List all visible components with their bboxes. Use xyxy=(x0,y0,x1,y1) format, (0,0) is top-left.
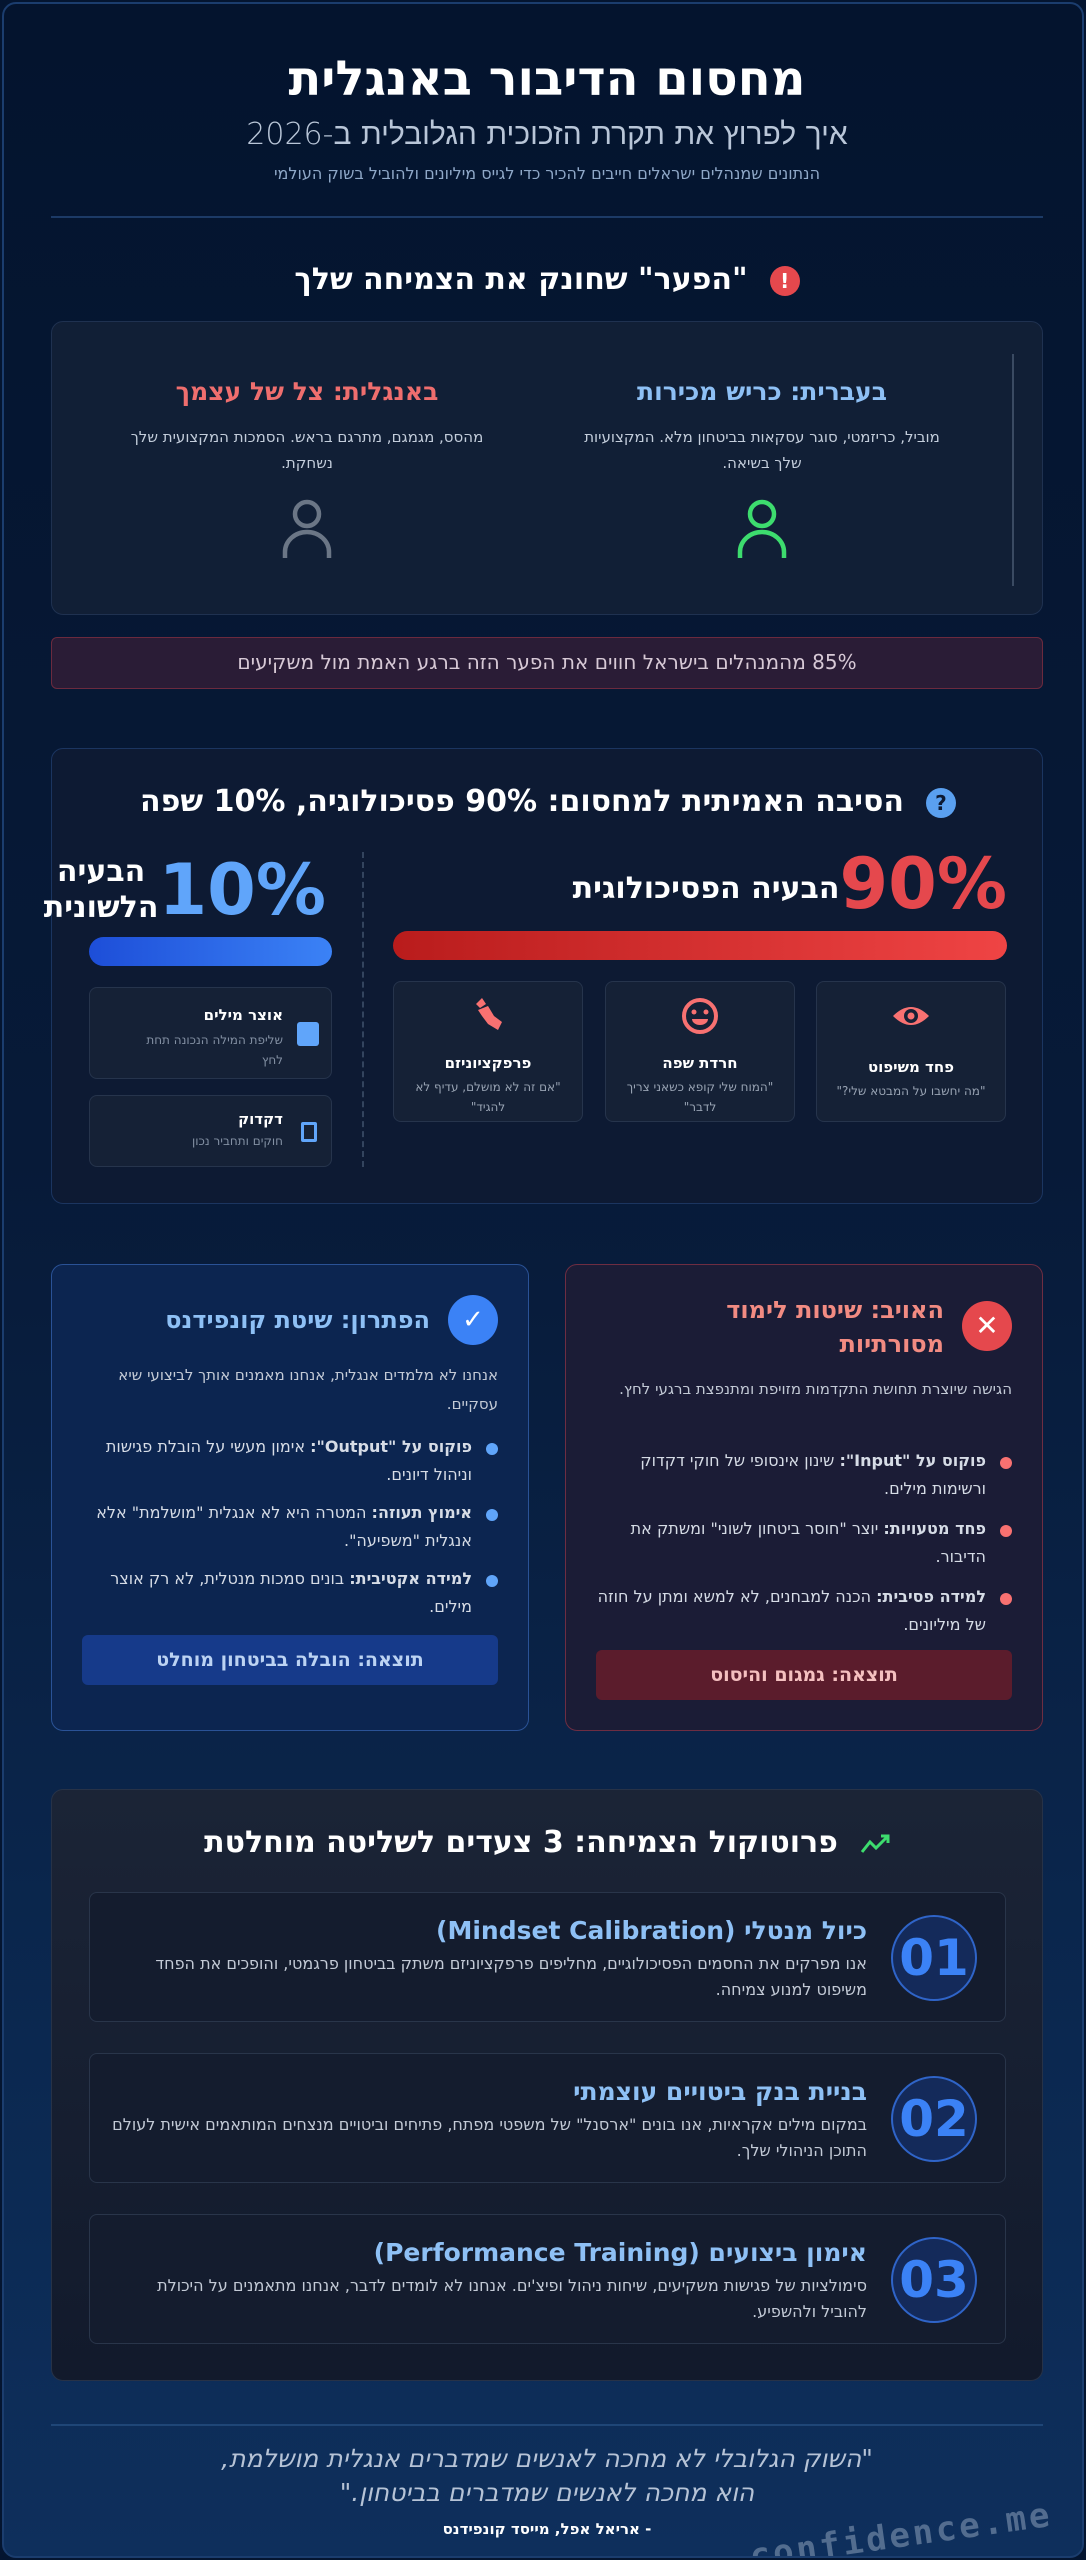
bullet list: למידה פסיבית: הכנה למבחנים, לא למשא ומתן על חוזה של מיליונים. xyxy=(598,1587,986,1634)
icon: question: ? xyxy=(935,790,947,814)
step 3: 03 xyxy=(899,2251,969,2309)
stat bar: 85% xyxy=(51,637,1043,689)
card: perfectionism: להגיד" xyxy=(471,1100,505,1114)
step 3: אימון ביצועים (Performance Training) xyxy=(374,2238,867,2267)
card: fear of judgment: פחד משיפוט xyxy=(868,1058,954,1076)
step 3: סימולציות של פגישות משקיעים, שיחות ניהול ופיצ'ים. אנחנו לא לומדים לדבר, אנחנו מתאמנים על היכולת להוביל ולהשפיע. xyxy=(157,2276,867,2321)
icon: alert: ! xyxy=(780,268,789,292)
10% label: 10% xyxy=(158,849,326,931)
heading: הפתרון: שיטת קונפידנס xyxy=(165,1306,430,1334)
icon: gray person xyxy=(282,500,332,558)
panel: enemy traditional methods xyxy=(565,1264,1043,1731)
icon: check: ✓ xyxy=(462,1305,484,1335)
card: speech anxiety: לדבר" xyxy=(684,1100,716,1114)
bullet list xyxy=(96,1437,498,1616)
quote: "השוק הגלובלי לא מחכה לאנשים שמדברים אנגלית מושלמת, xyxy=(221,2444,873,2473)
icon: green person xyxy=(738,500,786,558)
panel: growth protocol xyxy=(51,1789,1043,2381)
panel: gap comparison xyxy=(51,321,1043,615)
card: perfectionism: "אם זה לא מושלם, עדיף לא xyxy=(415,1080,561,1094)
panel: solution confidence method xyxy=(51,1264,529,1731)
bullet list xyxy=(598,1451,1012,1634)
card: vocabulary: אוצר מילים xyxy=(204,1006,283,1024)
bullet list: פחד מטעויות: יוצר "חוסר ביטחון לשוני" ומשתק את הדיבור. xyxy=(631,1519,986,1566)
10% label: הבעיה xyxy=(57,854,145,889)
quote xyxy=(221,2444,873,2538)
dashed divider xyxy=(362,852,364,1167)
bullet list: פוקוס על "Output": אימון מעשי על הובלת פגישות וניהול דיונים. xyxy=(106,1437,472,1484)
step 1: כיול מנטלי (Mindset Calibration) xyxy=(436,1916,867,1945)
heading: פרוטוקול הצמיחה: 3 צעדים לשליטה מוחלטת xyxy=(204,1825,838,1860)
heading: הסיבה האמיתית למחסום: 90% פסיכולוגיה, 10% שפה xyxy=(140,784,904,819)
bullet list: אימוץ תעוזה: המטרה היא לא אנגלית "מושלמת" אלא אנגלית "משפיעה". xyxy=(96,1503,472,1550)
title: מחסום הדיבור באנגלית xyxy=(288,51,806,107)
card: fear of judgment xyxy=(816,981,1006,1122)
step 2: במקום מילים אקראיות, אנו בונים "ארסנל" של משפטי מפתח, פתיחים וביטויים מנצחים המותאמים אישית לעולם התוכן הניהולי שלך. xyxy=(112,2115,867,2160)
red bar xyxy=(393,931,1007,960)
column: english: מהסס, מגמגם, מתרגם בראש. הסמכות המקצועית שלך xyxy=(131,428,483,446)
card: vocabulary xyxy=(89,987,332,1079)
card: speech anxiety xyxy=(605,981,795,1122)
result box xyxy=(596,1650,1012,1700)
90% label xyxy=(572,843,1007,925)
90% label: 90% xyxy=(839,843,1007,925)
icon: question xyxy=(926,788,956,818)
card: grammar xyxy=(89,1095,332,1167)
bullet list: פוקוס על "Input": שינון אינסופי של חוקי דקדוק ורשימות מילים. xyxy=(640,1451,986,1498)
column: english: נשחקת. xyxy=(281,454,333,472)
step 2: בניית בנק ביטויים עוצמתי xyxy=(573,2077,867,2106)
column: hebrew xyxy=(584,377,940,558)
step 1 xyxy=(89,1892,1006,2022)
card: speech anxiety: חרדת שפה xyxy=(662,1054,738,1072)
column: hebrew: מוביל, כריזמטי, סוגר עסקאות בביטחון מלא. המקצועיות xyxy=(584,428,940,446)
tagline: הנתונים שמנהלים ישראלים חייבים להכיר כדי לגייס מיליונים ולהוביל בשוק העולמי xyxy=(274,164,820,183)
step 1: אנו מפרקים את החסמים הפסיכולוגיים, מחליפים פרפקציוניזם משתק בביטחון פרגמטי, והופכים את הפחד משיפוט למנוע צמיחה. xyxy=(155,1954,867,1999)
card: speech anxiety: "המוח שלי קופא כשאני צריך xyxy=(627,1080,773,1094)
icon: trend xyxy=(860,1834,890,1853)
icon: check xyxy=(448,1295,498,1345)
icon: alert xyxy=(770,266,800,296)
subtitle: איך לפרוץ את תקרת הזכוכית הגלובלית ב-2026 xyxy=(246,117,848,152)
column: hebrew: שלך בשיאה. xyxy=(722,454,802,472)
icon: X: ✕ xyxy=(975,1309,999,1342)
step 2: 02 xyxy=(899,2090,969,2148)
10% label: הלשונית xyxy=(44,890,158,925)
result box xyxy=(82,1635,498,1685)
card: fear of judgment: "מה יחשבו על המבטא שלי?" xyxy=(837,1084,985,1098)
10% label xyxy=(44,849,326,931)
column: hebrew: בעברית: כריש מכירות xyxy=(637,377,887,406)
card: vocabulary: שליפת המילה הנכונה תחת לחץ xyxy=(146,1033,283,1067)
step 2 xyxy=(89,2053,1006,2183)
section heading: gap: "הפער" שחונק את הצמיחה שלך xyxy=(294,262,748,297)
icon: X xyxy=(962,1301,1012,1351)
column: english: באנגלית: צל של עצמך xyxy=(176,377,438,406)
90% label: הבעיה הפסיכולוגית xyxy=(573,870,839,906)
column: english xyxy=(131,377,483,558)
bullet list: למידה אקטיבית: בונים סמכות מנטלית, לא רק אוצר מילים. xyxy=(110,1569,472,1616)
blue bar xyxy=(89,937,332,966)
result box: תוצאה: הובלה בביטחון מוחלט xyxy=(156,1649,424,1671)
card: grammar: דקדוק xyxy=(238,1110,283,1128)
heading: האויב: שיטות לימוד מסורתיות xyxy=(726,1296,944,1358)
attribution: - אריאל אפל, מייסד קונפידנס xyxy=(443,2520,651,2538)
step 1: 01 xyxy=(899,1929,969,1987)
description: אנחנו לא מלמדים אנגלית, אנחנו מאמנים אותך לביצועי שיא עסקיים. xyxy=(118,1366,498,1413)
description: הגישה שיוצרת תחושת התקדמות מזויפת ומתנפצת ברגעי לחץ. xyxy=(619,1380,1012,1398)
result box: תוצאה: גמגום והיסוס xyxy=(710,1664,898,1686)
card: perfectionism xyxy=(393,981,583,1122)
header xyxy=(246,51,848,183)
step 3 xyxy=(89,2214,1006,2344)
panel: real reason xyxy=(51,748,1043,1204)
stat bar: 85%: 85% מהמנהלים בישראל חווים את הפער הזה ברגע האמת מול משקיעים xyxy=(237,650,857,674)
card: grammar: חוקים ותחביר נכון xyxy=(192,1134,283,1148)
quote: הוא מחכה לאנשים שמדברים בביטחון." xyxy=(340,2478,754,2507)
card: perfectionism: פרפקציוניזם xyxy=(445,1054,531,1072)
